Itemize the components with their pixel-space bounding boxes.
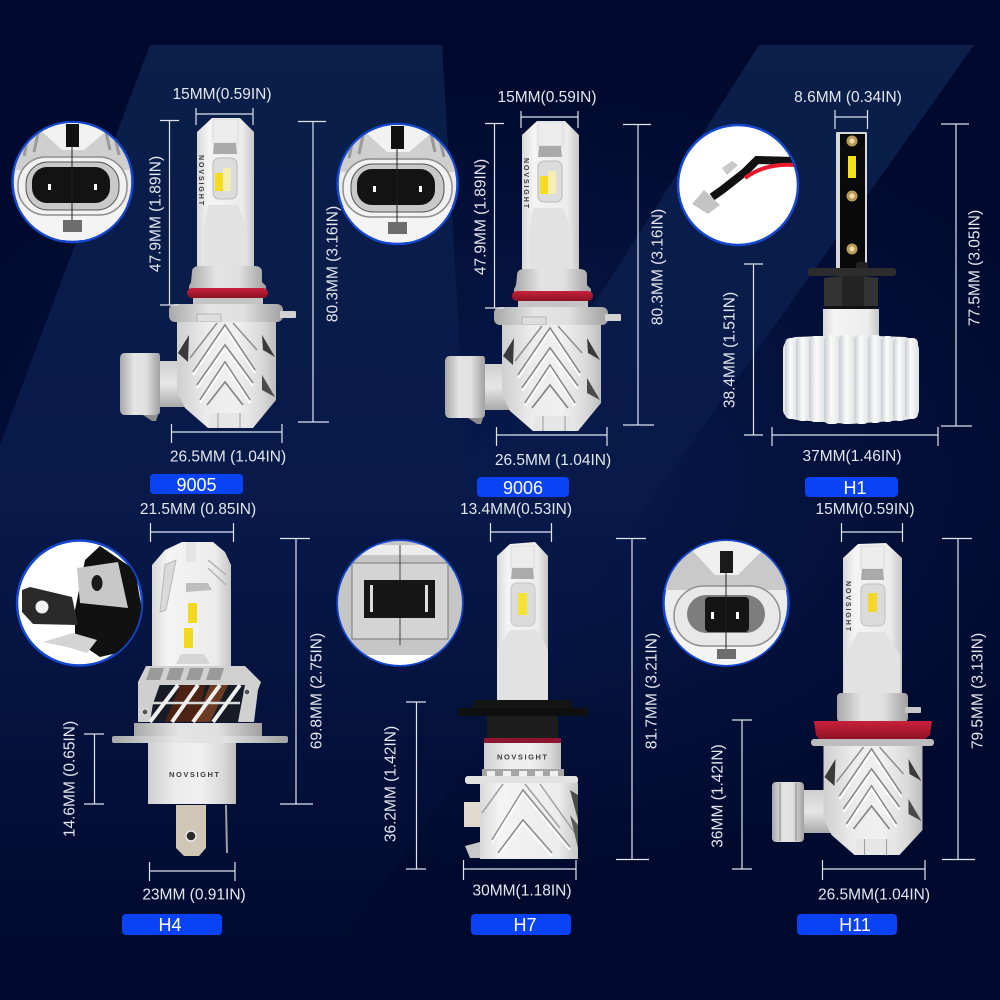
dimension: 81.7mm: 81.7MM (3.21IN) [644, 633, 660, 749]
dimension: 15mm [815, 501, 915, 542]
dimension: 81.7mm [616, 538, 660, 860]
label badge H11 [797, 914, 897, 935]
dimension: 69.8mm: 69.8MM (2.75IN) [308, 633, 326, 749]
dimension: 47.9mm [472, 124, 504, 308]
dimension: width 8.6mm [794, 89, 902, 129]
bulb: H4 [112, 542, 288, 856]
red ring and silver collar: NOVSIGHT [497, 752, 547, 762]
stem with LED: NOVSIGHT [522, 158, 529, 209]
dimension: 23mm: 23MM (0.91IN) [142, 886, 246, 904]
dimension: 77.5mm: 77.5MM (3.05IN) [966, 210, 984, 326]
finned heat sink [783, 335, 919, 424]
stem with LED: NOVSIGHT [844, 581, 851, 632]
panel: 9005 bulb [10, 86, 342, 495]
panel: H1 bulb [678, 89, 984, 498]
panel: H4 bulb [17, 501, 326, 935]
red flange [811, 721, 934, 746]
dimension: 36mm: 36MM (1.42IN) [710, 744, 726, 848]
stem with LED [522, 121, 579, 271]
black cap and flange [458, 700, 588, 738]
band and flange [112, 723, 288, 743]
dimension: 47.9mm: 47.9MM (1.89IN) [148, 156, 164, 272]
label badge H11: H11 [839, 915, 871, 935]
dimension: width 15mm: 15MM(0.59IN) [497, 89, 597, 106]
dimension: 14.6mm [62, 721, 104, 837]
stem with LED [843, 543, 902, 694]
dimension: 13.4mm [460, 501, 572, 542]
dimension: width 15mm [172, 86, 272, 125]
inset circle: 9006 socket [335, 124, 458, 244]
dimension: 77.5mm [941, 124, 984, 426]
collar and red ring [512, 269, 593, 309]
connector [120, 353, 200, 421]
dimension: 47.9mm: 47.9MM (1.89IN) [472, 159, 490, 275]
heat sink body with chevrons [824, 746, 922, 855]
dimension: 26.5mm [170, 424, 286, 466]
inset circle: H7 socket [335, 540, 465, 667]
label badge H1: H1 [843, 478, 867, 498]
label badge H7: H7 [513, 915, 537, 935]
dimension: 38.4mm: 38.4MM (1.51IN) [722, 292, 738, 408]
collar and red ring [187, 266, 268, 306]
dimension: width 8.6mm: 8.6MM (0.34IN) [794, 89, 902, 106]
dimension: 30mm [464, 860, 576, 900]
cylinder with logo [148, 743, 236, 804]
label badge 9005: 9005 [176, 475, 217, 495]
dimension: 80.3mm [623, 124, 666, 425]
heat sink body with chevrons [177, 322, 276, 428]
upper LED head [152, 542, 231, 666]
dimension: 37mm: 37MM(1.46IN) [802, 448, 902, 465]
white collar [823, 309, 879, 337]
heat sink body with chevrons [502, 325, 601, 431]
red ring and silver collar [484, 738, 561, 770]
dimension: 15mm: 15MM(0.59IN) [815, 501, 915, 518]
dimension: 13.4mm: 13.4MM(0.53IN) [460, 501, 572, 518]
dimension: 80.3mm: 80.3MM (3.16IN) [324, 206, 342, 322]
dimension: 80.3mm [298, 122, 342, 422]
label badge 9005 [150, 474, 243, 495]
dimension: 26.5mm: 26.5MM (1.04IN) [170, 448, 286, 466]
dimension: 21.5mm [140, 501, 256, 542]
dimension: 26.5mm: 26.5MM (1.04IN) [495, 452, 611, 469]
dimension: 26.5mm [818, 860, 930, 904]
dimension: 79.5mm: 79.5MM (3.13IN) [970, 633, 986, 749]
dimension: 47.9mm [148, 120, 179, 305]
cage with copper core [138, 666, 261, 722]
dimension: 26.5mm: 26.5MM(1.04IN) [818, 886, 930, 904]
flange [494, 307, 621, 325]
dimension: 69.8mm [280, 538, 326, 804]
panel: 9006 bulb [335, 89, 666, 498]
connector [445, 356, 525, 424]
bulb: H7 [458, 542, 588, 859]
dimension: 26.5mm [495, 427, 611, 469]
dimension: 36.2mm [382, 702, 426, 869]
label badge 9006 [477, 477, 569, 498]
inset circle: 9005 socket [10, 122, 132, 242]
inset circle: H1 wire connector [678, 125, 798, 245]
ridge row and body [464, 769, 578, 859]
dimension: 23mm [142, 862, 246, 904]
dimension: width 15mm: 15MM(0.59IN) [172, 86, 272, 103]
dimension: 79.5mm [942, 538, 986, 860]
inset circle: H4 terminals [17, 540, 142, 666]
dimension: 36.2mm: 36.2MM (1.42IN) [382, 726, 400, 842]
connector [772, 782, 838, 842]
dimension: 30mm: 30MM(1.18IN) [472, 882, 572, 900]
dimension: 38.4mm [722, 264, 763, 435]
stem with LED [197, 118, 254, 268]
bulb: 9005 [120, 118, 296, 428]
panel: H11 bulb [664, 501, 986, 935]
dimension: 36mm [710, 720, 752, 869]
dimension: 14.6mm: 14.6MM (0.65IN) [62, 721, 78, 837]
dark flange and socket [808, 262, 896, 309]
label badge H4: H4 [158, 915, 182, 935]
label badge H4 [122, 914, 222, 935]
dimension: width 15mm [497, 89, 597, 128]
bulb: 9006 [445, 121, 621, 431]
label badge H7 [471, 914, 571, 935]
stem with LED: NOVSIGHT [197, 155, 204, 206]
stem with LED [497, 542, 548, 700]
dimension: 37mm [772, 427, 938, 465]
inset circle: H11 socket [664, 540, 788, 668]
bulb: H11 [772, 543, 934, 855]
black LED strip [836, 132, 867, 270]
dimension: 80.3mm: 80.3MM (3.16IN) [650, 209, 666, 325]
flange [169, 304, 296, 322]
dimension: 21.5mm: 21.5MM (0.85IN) [140, 501, 256, 518]
label badge H1 [805, 477, 898, 498]
collar and tab [837, 693, 921, 722]
bulb: H1 [783, 132, 919, 424]
panel: H7 bulb [335, 501, 660, 935]
cylinder with logo: NOVSIGHT [169, 770, 219, 779]
terminal tab and pin [176, 805, 227, 856]
label badge 9006: 9006 [503, 478, 543, 498]
